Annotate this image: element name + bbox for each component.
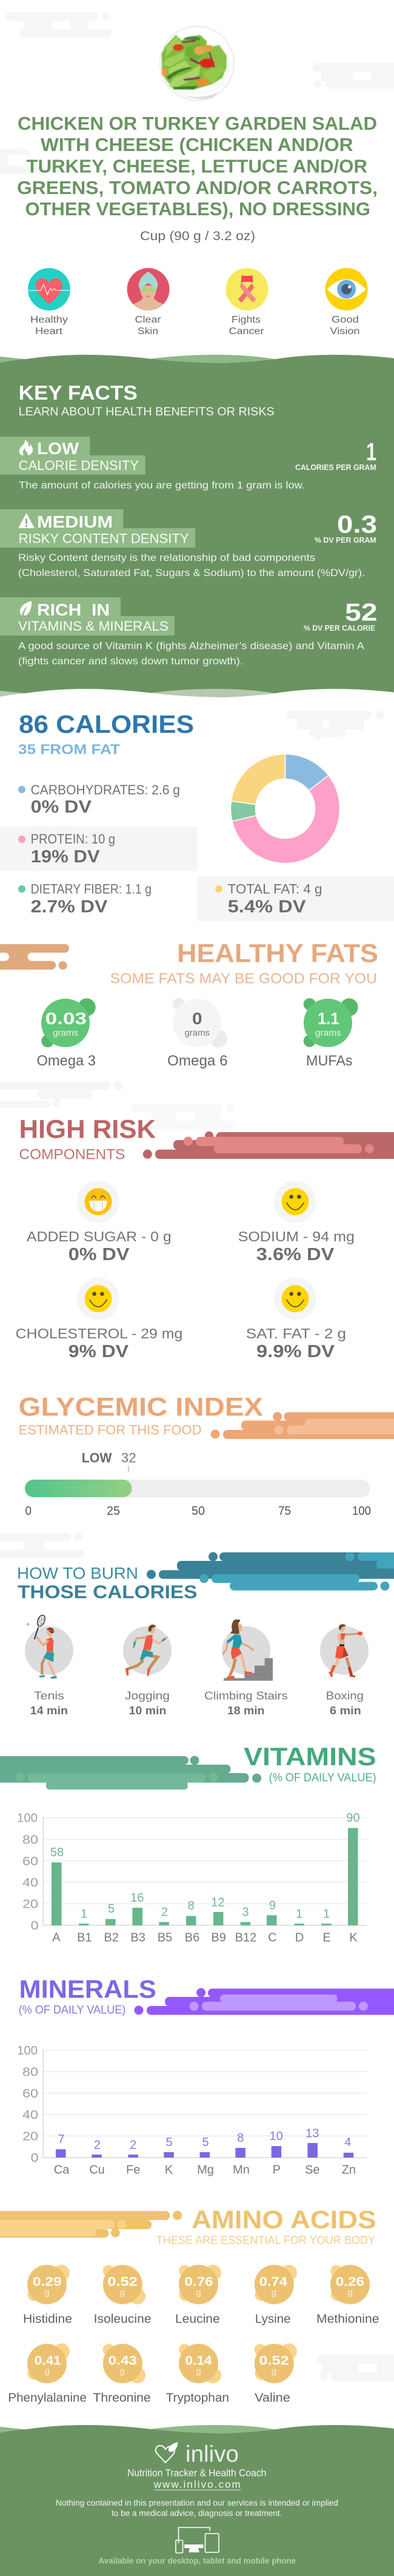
- histidine: g: [44, 2287, 50, 2298]
- icon labels: Skin: [138, 326, 158, 337]
- icon labels: Cancer: [229, 326, 264, 337]
- bar chart: vitamins: 3: [242, 1906, 249, 1919]
- fact: medium risky content density: [0, 509, 377, 579]
- heading: [19, 381, 275, 418]
- heading: amino acids: THESE ARE ESSENTIAL FOR YOUR BODY: [156, 2233, 375, 2247]
- bar chart: minerals: 4: [344, 2136, 351, 2149]
- website link: www.inlivo.com: [153, 2479, 241, 2490]
- total fat: 5.4% DV: [228, 897, 306, 917]
- heading: KEY FACTS: [19, 381, 138, 404]
- icon labels: Healthy: [30, 315, 68, 325]
- disclaimer: to be a medical advice, diagnosis or treatment.: [112, 2508, 282, 2518]
- fact: low calorie density: [0, 437, 376, 491]
- disclaimer: [56, 2498, 338, 2518]
- heading: calories: 35 FROM FAT: [18, 742, 121, 757]
- badge: omega 3: 0.03: [45, 1009, 87, 1028]
- added sugar: ADDED SUGAR - 0 g: [27, 1229, 172, 1244]
- total fat: [197, 876, 394, 921]
- saturated fat: [246, 1278, 346, 1361]
- fact: medium risky content density: % DV PER GRAM: [315, 535, 376, 545]
- protein: [0, 827, 198, 871]
- bar chart: minerals: 5: [202, 2136, 209, 2149]
- bar chart: vitamins: D: [295, 1931, 304, 1945]
- saturated fat: 9.9% DV: [256, 1342, 335, 1361]
- valine: Valine: [255, 2391, 290, 2404]
- carbohydrates: [18, 782, 180, 817]
- bar chart: vitamins: A: [52, 1931, 61, 1945]
- bar chart: vitamins: [17, 1811, 367, 1945]
- exercise: climbing stairs: [204, 1620, 288, 1717]
- glycemic index bar: 0: [25, 1504, 32, 1518]
- bar chart: vitamins: B3: [130, 1931, 145, 1945]
- icon: warning triangle: [18, 513, 35, 528]
- icon: fights cancer: [225, 268, 268, 310]
- threonine: g: [119, 2366, 125, 2376]
- bar chart: minerals: 0: [31, 2152, 39, 2165]
- exercise: tennis: [25, 1614, 73, 1717]
- methionine: Methionine: [316, 2313, 379, 2326]
- threonine: 0.43: [109, 2354, 137, 2368]
- exercise: climbing stairs: Climbing Stairs: [204, 1689, 288, 1702]
- icon: clear skin: [127, 268, 170, 310]
- heading: healthy fats: [0, 939, 378, 987]
- glycemic index bar: [25, 1451, 371, 1518]
- exercise: tennis: 14 min: [30, 1704, 68, 1717]
- bar chart: minerals: 5: [165, 2136, 173, 2149]
- heading: vitamins: [0, 1742, 376, 1789]
- valine: g: [272, 2366, 276, 2376]
- exercise: jogging: 10 min: [129, 1704, 166, 1717]
- bar chart: vitamins: B2: [104, 1931, 119, 1945]
- bar chart: vitamins: K: [349, 1931, 358, 1945]
- title: OTHER VEGETABLES), NO DRESSING: [25, 199, 370, 220]
- icon: devices: [176, 2527, 219, 2553]
- benefit icons row: [28, 268, 368, 337]
- bar chart: vitamins: 8: [187, 1899, 195, 1913]
- bar chart: vitamins: B5: [158, 1931, 172, 1945]
- logo: inlivo: [156, 2442, 239, 2467]
- fact: rich in vitamins and minerals: RICH IN: [37, 600, 110, 619]
- bar chart: vitamins: 1: [81, 1908, 87, 1921]
- exercise: boxing: [320, 1624, 369, 1717]
- fact: low calorie density: 1: [366, 438, 376, 466]
- exercise: boxing: 6 min: [330, 1704, 361, 1717]
- methionine: 0.26: [336, 2275, 364, 2289]
- badge: omega 6: Omega 6: [167, 1053, 228, 1069]
- badge: mufas: 1.1: [318, 1009, 339, 1028]
- availability note: Available on your desktop, tablet and mobile phone: [98, 2556, 296, 2565]
- exercise: climbing stairs: 18 min: [227, 1704, 264, 1717]
- protein: 19% DV: [31, 847, 100, 867]
- added sugar: 0% DV: [68, 1245, 130, 1264]
- cholesterol: 9% DV: [68, 1342, 129, 1361]
- icon labels: Fights: [232, 315, 261, 325]
- bar chart: minerals: 40: [22, 2108, 38, 2122]
- histidine: 0.29: [33, 2275, 62, 2289]
- heading: how to burn those calories: [17, 1552, 394, 1603]
- bar chart: vitamins: 12: [211, 1896, 225, 1909]
- tryptophan: g: [196, 2366, 201, 2376]
- threonine: Threonine: [93, 2391, 151, 2404]
- glycemic index bar: 100: [352, 1504, 371, 1518]
- bar chart: vitamins: B9: [211, 1931, 226, 1945]
- heading: vitamins: VITAMINS: [244, 1742, 376, 1771]
- dietary fiber: 2.7% DV: [31, 897, 107, 917]
- bar chart: minerals: Zn: [342, 2163, 356, 2176]
- bar chart: vitamins: 5: [108, 1902, 115, 1916]
- total fat: TOTAL FAT: 4 g: [228, 882, 322, 897]
- bar chart: minerals: 2: [94, 2138, 101, 2152]
- fact: low calorie density: CALORIE DENSITY: [19, 458, 139, 473]
- bar chart: vitamins: C: [268, 1931, 277, 1945]
- leucine: 0.76: [185, 2275, 213, 2289]
- fact: low calorie density: CALORIES PER GRAM: [295, 463, 376, 472]
- exercise: jogging: [123, 1625, 172, 1717]
- icon: leaf: [20, 601, 32, 615]
- bowl: [165, 64, 229, 99]
- tryptophan: [166, 2344, 229, 2404]
- bar chart: minerals: 20: [22, 2130, 38, 2144]
- phenylalanine: 0.41: [35, 2354, 61, 2368]
- fact: medium risky content density: (Cholesterol, Saturated Fat, Sugars & Sodium) to the amount (%DV/gr).: [18, 568, 365, 579]
- isoleucine: Isoleucine: [94, 2313, 152, 2326]
- panel: key facts: [0, 355, 394, 699]
- bar chart: vitamins: B6: [185, 1931, 199, 1945]
- phenylalanine: Phenylalanine: [8, 2391, 87, 2404]
- bar chart: vitamins: 20: [22, 1898, 38, 1911]
- macro legend: [0, 782, 394, 921]
- heading: minerals: [19, 1975, 394, 2017]
- fact: rich in vitamins and minerals: VITAMINS & MINERALS: [18, 619, 169, 634]
- bar chart: minerals: Fe: [126, 2163, 140, 2176]
- bar chart: vitamins: 58: [50, 1846, 64, 1859]
- bar chart: minerals: Se: [305, 2163, 320, 2176]
- bar chart: minerals: Mn: [233, 2163, 250, 2176]
- glycemic index bar: 25: [107, 1504, 120, 1518]
- isoleucine: g: [119, 2287, 125, 2298]
- glycemic index bar: LOW: [82, 1451, 112, 1465]
- bar chart: minerals: P: [273, 2163, 281, 2176]
- bar chart: minerals: Ca: [54, 2163, 70, 2176]
- icon labels: Good: [332, 315, 359, 325]
- methionine: g: [347, 2287, 353, 2298]
- glycemic index bar: 50: [192, 1504, 205, 1518]
- added sugar: [27, 1181, 172, 1264]
- fact: low calorie density: LOW: [37, 439, 79, 458]
- bar chart: vitamins: 1: [296, 1908, 302, 1921]
- valine: 0.52: [259, 2354, 289, 2368]
- high risk components: [16, 1181, 355, 1361]
- bar chart: vitamins: B1: [77, 1931, 92, 1945]
- food photo: garden salad: [160, 26, 234, 100]
- heading: LEARN ABOUT HEALTH BENEFITS OR RISKS: [19, 405, 275, 418]
- bar chart: minerals: 80: [22, 2066, 38, 2079]
- bar chart: vitamins: 9: [269, 1899, 276, 1913]
- bar chart: minerals: Mg: [197, 2163, 214, 2176]
- dietary fiber: [18, 882, 152, 917]
- fact: medium risky content density: RISKY CONTENT DENSITY: [19, 531, 189, 546]
- exercises: [25, 1614, 369, 1717]
- bar chart: vitamins: B12: [235, 1931, 256, 1945]
- footer: [0, 2425, 394, 2576]
- bar chart: vitamins: E: [322, 1931, 331, 1945]
- serving size: Cup (90 g / 3.2 oz): [140, 229, 255, 243]
- bar chart: vitamins: 16: [130, 1891, 144, 1905]
- bar chart: minerals: [17, 2044, 367, 2176]
- heading: high risk: [19, 1115, 394, 1162]
- bar chart: minerals: 10: [269, 2130, 283, 2143]
- badge: omega 3: grams: [53, 1028, 78, 1038]
- cholesterol: [16, 1278, 182, 1361]
- heading: how to burn those calories: HOW TO BURN: [17, 1565, 138, 1583]
- title: CHICKEN OR TURKEY GARDEN SALAD: [18, 113, 377, 134]
- amino acid badges: [8, 2265, 379, 2404]
- fact: medium risky content density: MEDIUM: [37, 512, 113, 531]
- methionine: [316, 2265, 379, 2326]
- badge: mufas: MUFAs: [306, 1053, 353, 1069]
- bar chart: vitamins: 60: [22, 1855, 38, 1868]
- bar chart: minerals: 7: [58, 2133, 65, 2146]
- cholesterol: CHOLESTEROL - 29 mg: [16, 1326, 182, 1341]
- disclaimer: Nothing contained in this presentation and our services is intended or implied: [56, 2498, 338, 2507]
- bar chart: minerals: 60: [22, 2087, 38, 2101]
- exercise: boxing: Boxing: [326, 1689, 364, 1702]
- healthy fats badges: [36, 998, 358, 1069]
- carbohydrates: 0% DV: [31, 797, 92, 817]
- bar chart: minerals: 8: [237, 2132, 244, 2145]
- icon: flame: [19, 440, 33, 455]
- glycemic index bar: 75: [278, 1504, 291, 1518]
- heading: high risk: COMPONENTS: [19, 1146, 125, 1162]
- valine: [255, 2343, 297, 2404]
- threonine: [93, 2344, 151, 2404]
- icon labels: Vision: [330, 326, 360, 337]
- heading: amino acids: [0, 2205, 376, 2247]
- icon: healthy heart: [28, 268, 70, 310]
- lysine: [255, 2265, 297, 2326]
- heading: healthy fats: HEALTHY FATS: [177, 939, 378, 968]
- title: TURKEY, CHEESE, LETTUCE AND/OR: [27, 156, 367, 177]
- fact: medium risky content density: Risky Content density is the relationship of bad components: [18, 552, 315, 563]
- fact: low calorie density: The amount of calories you are getting from 1 gram is low.: [19, 480, 305, 491]
- badge: omega 6: 0: [192, 1009, 202, 1028]
- heading: healthy fats: SOME FATS MAY BE GOOD FOR YOU: [110, 971, 377, 987]
- sodium: SODIUM - 94 mg: [238, 1229, 355, 1244]
- heading: high risk: HIGH RISK: [19, 1115, 156, 1144]
- saturated fat: SAT. FAT - 2 g: [246, 1326, 346, 1341]
- fact: rich in vitamins and minerals: 52: [345, 599, 378, 626]
- isoleucine: 0.52: [107, 2275, 138, 2289]
- tryptophan: Tryptophan: [166, 2391, 229, 2404]
- bar chart: vitamins: 80: [22, 1834, 38, 1847]
- heading: how to burn those calories: THOSE CALORIES: [18, 1581, 197, 1603]
- heading: glycemic index: ESTIMATED FOR THIS FOOD: [19, 1423, 201, 1438]
- sodium: [238, 1181, 355, 1264]
- heading: calories: [18, 709, 194, 757]
- badge: mufas: grams: [315, 1028, 341, 1038]
- title: [17, 113, 378, 220]
- bar chart: vitamins: 100: [17, 1812, 38, 1825]
- carbohydrates: CARBOHYDRATES: 2.6 g: [31, 782, 180, 797]
- salad leaves: [162, 35, 227, 90]
- fact: rich in vitamins and minerals: (fights cancer and slows down tumor growth).: [18, 656, 243, 667]
- icon labels: Heart: [35, 326, 63, 337]
- icon labels: Clear: [135, 315, 161, 325]
- heading: glycemic index: GLYCEMIC INDEX: [19, 1393, 263, 1422]
- heading: amino acids: AMINO ACIDS: [192, 2205, 376, 2233]
- isoleucine: [94, 2265, 152, 2326]
- title: GREENS, TOMATO AND/OR CARROTS,: [17, 178, 378, 198]
- logo: inlivo: inlivo: [185, 2442, 239, 2467]
- tagline: Nutrition Tracker & Health Coach: [127, 2467, 266, 2479]
- heading: glycemic index: [19, 1393, 394, 1439]
- heading: vitamins: (% OF DAILY VALUE): [269, 1771, 376, 1785]
- heading: calories: 86 CALORIES: [19, 709, 194, 738]
- fact: medium risky content density: 0.3: [337, 511, 377, 538]
- bar chart: vitamins: 0: [31, 1919, 39, 1933]
- bar chart: minerals: K: [165, 2163, 173, 2176]
- fact: rich in vitamins and minerals: % DV PER CALORIE: [304, 623, 375, 632]
- heading: minerals: (% OF DAILY VALUE): [19, 2004, 125, 2017]
- histidine: [23, 2265, 72, 2326]
- bar chart: vitamins: 2: [161, 1906, 168, 1919]
- donut chart: [231, 754, 340, 864]
- leucine: Leucine: [175, 2313, 220, 2326]
- bar chart: vitamins: 90: [346, 1811, 360, 1825]
- dietary fiber: DIETARY FIBER: 1.1 g: [31, 882, 152, 897]
- glycemic index bar: 32: [121, 1451, 136, 1465]
- lysine: 0.74: [259, 2275, 287, 2289]
- badge: omega 6: [167, 998, 228, 1069]
- icon: good vision: [326, 268, 368, 310]
- badge: omega 6: grams: [184, 1028, 210, 1038]
- title: WITH CHEESE (CHICKEN AND/OR: [41, 135, 353, 155]
- sodium: 3.6% DV: [256, 1245, 334, 1264]
- bar chart: minerals: Cu: [89, 2163, 105, 2176]
- lysine: g: [272, 2287, 276, 2298]
- lysine: Lysine: [255, 2313, 291, 2326]
- histidine: Histidine: [23, 2313, 72, 2326]
- bar chart: vitamins: 1: [323, 1908, 330, 1921]
- protein: PROTEIN: 10 g: [31, 831, 115, 847]
- badge: omega 3: Omega 3: [36, 1053, 96, 1069]
- leucine: [175, 2265, 221, 2326]
- fact: rich in vitamins and minerals: A good source of Vitamin K (fights Alzheimer’s disease) and Vitamin A: [18, 641, 364, 652]
- heading: minerals: MINERALS: [19, 1975, 156, 2004]
- bar chart: minerals: 13: [306, 2127, 319, 2140]
- icon labels: [30, 315, 360, 337]
- badge: omega 3: [36, 998, 96, 1069]
- bar chart: minerals: 2: [130, 2138, 136, 2152]
- badge: mufas: [304, 998, 358, 1069]
- phenylalanine: [8, 2343, 87, 2404]
- fact: rich in vitamins and minerals: [0, 597, 378, 667]
- phenylalanine: g: [44, 2366, 50, 2376]
- exercise: jogging: Jogging: [125, 1689, 170, 1702]
- bar chart: vitamins: 40: [22, 1876, 38, 1890]
- bar chart: minerals: 100: [17, 2044, 38, 2058]
- tryptophan: 0.14: [185, 2354, 212, 2368]
- exercise: tennis: Tenis: [34, 1689, 64, 1702]
- leucine: g: [196, 2287, 201, 2298]
